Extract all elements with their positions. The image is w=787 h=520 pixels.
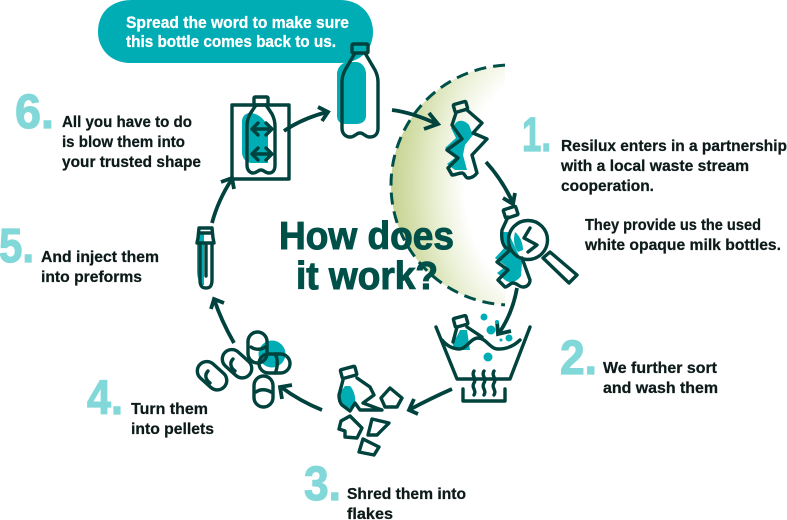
step 4: into pellets <box>131 421 214 438</box>
step 6: is blow them into <box>62 134 185 151</box>
step 6: All you have to do <box>62 114 192 131</box>
step 3: Shred them into <box>347 486 466 503</box>
step 4 <box>87 372 214 438</box>
arrow: crushed bottle to sorting <box>486 162 515 204</box>
step 6 <box>15 86 201 171</box>
step 1: They provide us the used <box>585 217 761 234</box>
title <box>279 215 454 298</box>
step 1 <box>522 109 787 254</box>
icon: blow mold with bottle <box>232 97 289 179</box>
step 2: 2. <box>560 332 597 385</box>
arrow: mold to finished bottle <box>284 107 328 131</box>
step 1: white opaque milk bottles. <box>584 237 781 254</box>
arrow: washing to shredding <box>409 389 452 414</box>
step 5: into preforms <box>41 269 142 286</box>
step 3: 3. <box>304 458 341 511</box>
icon: shredded bottle and flakes <box>339 366 402 455</box>
step 2: and wash them <box>603 380 718 397</box>
arrow: sorting to washing <box>497 288 517 334</box>
icon: preform <box>197 228 214 288</box>
icon: finished bottle <box>337 44 378 137</box>
step 6: 6. <box>15 86 54 139</box>
step 4: Turn them <box>131 401 208 418</box>
title: it work? <box>296 255 438 298</box>
icon: pellets <box>193 332 290 407</box>
step 2: We further sort <box>603 360 718 377</box>
step 3 <box>304 458 466 520</box>
arrow: finished bottle to step 1 <box>392 110 438 129</box>
step 5: And inject them <box>41 249 159 266</box>
green gradient circle with dashed outline <box>391 65 505 305</box>
callout: spread the word <box>98 0 373 63</box>
step 5: 5. <box>0 220 34 273</box>
callout: spread the word: this bottle comes back to us. <box>126 32 336 51</box>
icon: bottle under magnifying glass <box>495 206 577 287</box>
arrow: shredding to pellets <box>280 385 322 410</box>
step 1: 1. <box>522 109 551 162</box>
step 1: with a local waste stream <box>560 158 749 175</box>
step 4: 4. <box>87 372 123 425</box>
arrow: pellets to preform <box>211 299 234 343</box>
step 6: your trusted shape <box>62 154 201 171</box>
title: How does <box>279 215 454 258</box>
arrow: preform to mold <box>212 178 234 223</box>
callout: spread the word: Spread the word to make sure <box>126 13 349 32</box>
step 5 <box>0 220 159 286</box>
icon: crushed bottle <box>445 101 487 178</box>
icon: washing basin <box>436 314 530 401</box>
step 2 <box>560 332 718 397</box>
step 1: cooperation. <box>561 178 654 195</box>
